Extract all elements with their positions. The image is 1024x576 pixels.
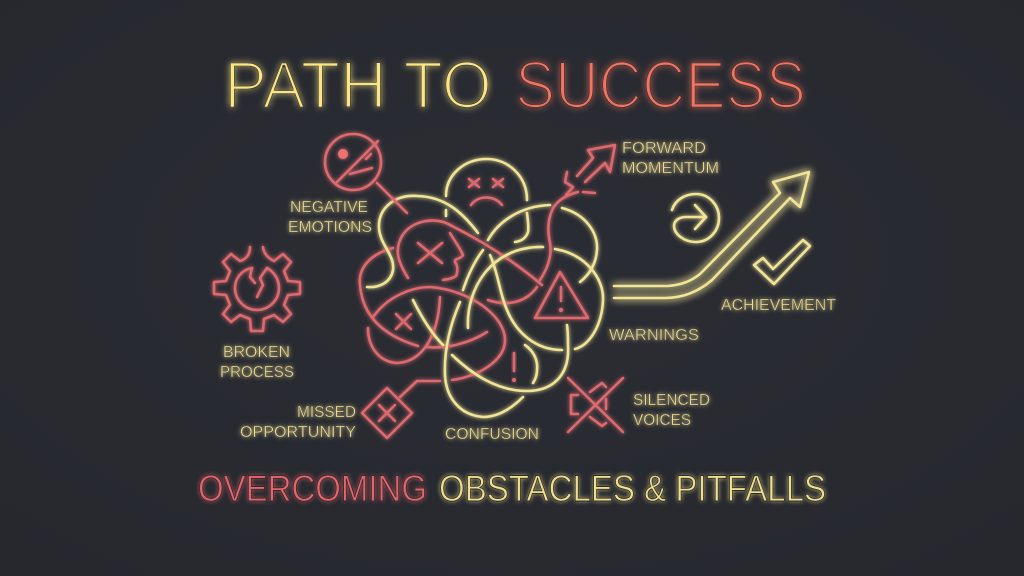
connector: gear to tangle — [312, 287, 355, 289]
icon: silenced speaker — [568, 378, 623, 432]
icon: negative emotions sign — [325, 134, 407, 213]
big rising arrow — [614, 172, 809, 298]
icon: exclamation mark — [512, 353, 516, 382]
icon: broken red arrow — [565, 145, 615, 195]
icon: missed opportunity diamond — [362, 381, 440, 438]
red strands — [360, 192, 578, 380]
label: forward momentum: MOMENTUM — [622, 160, 719, 177]
icon: check mark — [754, 240, 810, 284]
label: broken process: PROCESS — [220, 364, 294, 381]
icon: small x mark — [396, 314, 411, 329]
label: silenced voices: SILENCED — [633, 392, 710, 409]
tangle of red and yellow lines — [360, 159, 603, 417]
yellow strands — [367, 159, 603, 417]
label: broken process — [220, 344, 294, 381]
subtitle — [198, 468, 826, 509]
label: forward momentum — [622, 140, 719, 177]
label: negative emotions: NEGATIVE — [290, 199, 368, 216]
title: path to: PATH TO — [224, 48, 492, 123]
label: silenced voices — [633, 392, 710, 429]
title: success: SUCCESS — [515, 48, 806, 123]
label: missed opportunity — [240, 404, 356, 441]
label: warnings: WARNINGS — [609, 327, 699, 344]
label: silenced voices: VOICES — [633, 412, 691, 429]
icon: broken gear — [214, 247, 300, 331]
icon: warning triangle — [535, 272, 588, 318]
label: achievement: ACHIEVEMENT — [721, 297, 837, 314]
label: forward momentum: FORWARD — [622, 140, 706, 157]
label: negative emotions: EMOTIONS — [288, 219, 372, 236]
title — [224, 48, 806, 123]
label: missed opportunity: MISSED — [297, 404, 356, 421]
icon: circular arrow — [672, 194, 719, 242]
icon: face profile with x mark — [418, 233, 463, 280]
label: broken process: BROKEN — [223, 344, 290, 361]
icon: person head with x eyes and frown — [469, 179, 503, 205]
subtitle: obstacles and pitfalls: OBSTACLES & PITFALLS — [439, 468, 826, 509]
label: missed opportunity: OPPORTUNITY — [240, 424, 356, 441]
label: confusion: CONFUSION — [445, 426, 539, 443]
subtitle: overcoming: OVERCOMING — [198, 468, 427, 509]
label: negative emotions — [288, 199, 372, 236]
